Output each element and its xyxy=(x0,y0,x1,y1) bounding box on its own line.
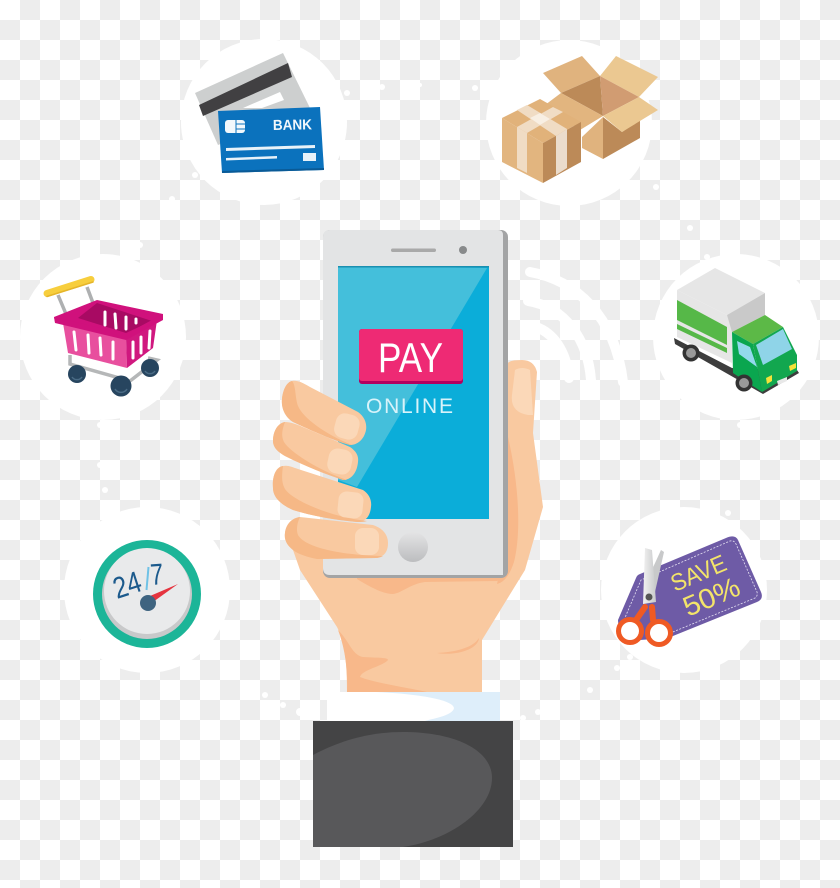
icon: discount tag with scissors xyxy=(601,507,767,673)
sleeve xyxy=(313,721,513,847)
wifi signal arcs xyxy=(528,272,623,382)
icon: parcels xyxy=(486,40,658,206)
open box xyxy=(543,56,658,159)
white dotted ring xyxy=(97,83,748,721)
discount value: 50% xyxy=(678,571,745,623)
fingers xyxy=(273,381,388,559)
palm and thumb xyxy=(293,360,543,692)
icon: bank cards xyxy=(181,39,347,205)
save label: SAVE xyxy=(667,550,731,598)
icon: delivery truck xyxy=(653,254,819,420)
scissors xyxy=(618,548,670,644)
smartphone xyxy=(323,230,508,578)
sleeve cuff xyxy=(327,692,500,721)
closed box xyxy=(502,99,581,183)
clock text: 24 xyxy=(109,566,146,606)
icon: 24/7 clock xyxy=(64,507,230,673)
icon: shopping cart xyxy=(20,254,186,420)
pay button: PAY xyxy=(378,334,443,381)
bank label: BANK xyxy=(273,117,313,134)
online label: ONLINE xyxy=(366,395,453,418)
hand and phone xyxy=(273,230,543,847)
phone screen xyxy=(338,266,489,519)
home button xyxy=(398,532,428,562)
icon: 24/7 clock: 7 xyxy=(149,558,164,592)
pay button xyxy=(359,329,463,384)
